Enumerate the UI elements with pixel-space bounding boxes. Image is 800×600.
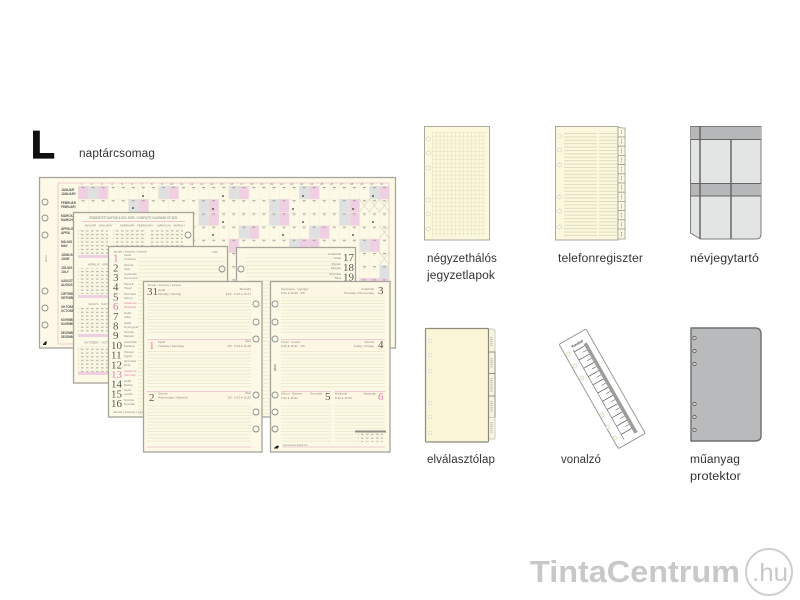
day numbers header: 22 bbox=[290, 182, 294, 186]
day numbers 17 to 19: Piroska bbox=[331, 266, 341, 270]
day block 4: Péntek bbox=[365, 340, 374, 344]
day list: 14 bbox=[111, 379, 122, 391]
day block 4: Titusz · Leona bbox=[281, 340, 300, 344]
day block 31: 31/5 · 6:32 ● 16:27 bbox=[226, 292, 251, 296]
day block 1: 1/5 · 6:32 ● 16:28 bbox=[227, 344, 251, 348]
day block 3: Genovéva · Gyöngyi bbox=[281, 287, 309, 291]
label: műanyag protektor: műanyag bbox=[690, 454, 740, 466]
day list: 13 bbox=[111, 369, 122, 381]
day numbers header: 25 bbox=[320, 182, 324, 186]
day block 31 bbox=[147, 286, 251, 335]
day block 1: Újév bbox=[245, 338, 251, 343]
mini calendar april bbox=[78, 262, 111, 298]
day list: 7 bbox=[113, 311, 119, 323]
mini month calendar bbox=[355, 430, 386, 442]
day list: Marcell bbox=[124, 334, 134, 338]
panel: business card holder bbox=[690, 126, 761, 239]
holes bbox=[253, 301, 259, 432]
day list: Ernő bbox=[124, 363, 131, 367]
side hole bbox=[185, 232, 191, 238]
day numbers 17 to 19: 19 bbox=[343, 272, 354, 284]
day numbers header: 17 bbox=[240, 182, 244, 186]
day list: 2 bbox=[113, 262, 118, 274]
middle band bbox=[691, 183, 761, 196]
day numbers header: 26 bbox=[330, 182, 334, 186]
day block 6: Boldizsár bbox=[335, 392, 347, 396]
day numbers header: 1 bbox=[81, 182, 83, 186]
mini calendar october bbox=[78, 340, 117, 375]
day numbers header: 15 bbox=[220, 182, 224, 186]
day numbers header: 10 bbox=[170, 182, 174, 186]
month labels: ÁPRILIS bbox=[61, 226, 74, 231]
day list: Fruzsina bbox=[124, 257, 136, 261]
side hole bbox=[238, 266, 244, 272]
holes bbox=[693, 336, 696, 432]
heading: size letter L: L bbox=[31, 124, 55, 167]
day block 2: 2/5 · 6:32 ● 16:29 bbox=[227, 396, 251, 400]
day list: Kedd bbox=[124, 321, 131, 325]
day list: Titusz bbox=[124, 286, 132, 290]
day list: Gyöngyvér bbox=[124, 325, 139, 329]
month labels: JÚLIUS bbox=[61, 265, 72, 270]
brand mark bbox=[43, 341, 47, 345]
day list: 11 bbox=[111, 350, 122, 362]
month labels: AUGUSZTUS bbox=[61, 279, 76, 283]
day numbers 17 to 19: 18 bbox=[343, 262, 354, 274]
weekend cells gray bbox=[88, 186, 390, 278]
day numbers header: 29 bbox=[360, 182, 364, 186]
day block 31: Hétfő bbox=[158, 288, 166, 292]
day numbers 17 to 19: Sára bbox=[335, 276, 341, 280]
day numbers header: 28 bbox=[350, 182, 354, 186]
day list: Vasárnap bbox=[124, 369, 137, 373]
day grid bbox=[78, 186, 389, 344]
month labels bbox=[61, 187, 77, 339]
day numbers header: 19 bbox=[260, 182, 264, 186]
footer line bbox=[147, 446, 251, 448]
day list: 9 bbox=[113, 330, 119, 342]
month footer: Január | January | Januar bbox=[113, 410, 147, 414]
holes bbox=[428, 339, 432, 435]
month labels: DECEMBER bbox=[61, 331, 77, 335]
panel: divider thumbnail bbox=[426, 328, 495, 442]
month labels: DECEMBER bbox=[61, 335, 77, 339]
panel: monthly sheet left bbox=[108, 246, 228, 417]
month labels: JANUÁR bbox=[61, 187, 75, 192]
day numbers header: 5 bbox=[121, 182, 123, 186]
day list: 1 bbox=[113, 253, 118, 265]
day list: Hétfő bbox=[124, 311, 132, 315]
day numbers header: 11 bbox=[180, 182, 183, 186]
day block 1: 1 bbox=[149, 340, 154, 352]
holes bbox=[558, 134, 562, 229]
day block 31: Monday | Montag bbox=[158, 292, 181, 296]
day list: Szerda bbox=[124, 263, 134, 267]
panel: ruler bbox=[559, 329, 645, 449]
label: négyzethálós jegyzetlapok: négyzethálós bbox=[427, 253, 497, 265]
day list: Simon bbox=[124, 296, 133, 300]
day block 1 bbox=[147, 338, 251, 389]
day numbers header: 8 bbox=[151, 182, 153, 186]
label: elválasztólap: elválasztólap bbox=[427, 454, 495, 466]
day block 3: 3 bbox=[378, 285, 384, 297]
day block 2: Wednesday | Mittwoch bbox=[158, 396, 188, 400]
holes bbox=[272, 301, 278, 432]
month labels: JÚNIUS bbox=[61, 252, 73, 257]
ruler title: Vonalzó bbox=[571, 339, 584, 349]
month header: Január | January | Januar bbox=[113, 250, 147, 254]
day numbers header: 30 bbox=[370, 182, 374, 186]
month labels: JUNE bbox=[61, 257, 70, 261]
day block 6: 6 bbox=[378, 391, 384, 403]
side hole bbox=[219, 266, 225, 272]
day list: Attila bbox=[124, 315, 131, 319]
day block 5 bbox=[281, 391, 331, 444]
day numbers header: 24 bbox=[310, 182, 314, 186]
day block 5: Simon · Edvárd bbox=[281, 392, 302, 396]
label: műanyag protektor: protektor bbox=[690, 471, 741, 483]
label: műanyag protektor bbox=[690, 454, 741, 483]
month labels: JULY bbox=[61, 270, 70, 274]
month labels: NOVEMBER bbox=[61, 322, 77, 326]
label: vonalzó: vonalzó bbox=[561, 454, 601, 466]
label: telefonregiszter: telefonregiszter bbox=[558, 253, 643, 265]
label: négyzethálós jegyzetlapok bbox=[426, 253, 497, 282]
day block 4: 6:32 ● 16:31 · 4/5 bbox=[281, 344, 305, 348]
day list: Ágota bbox=[124, 354, 132, 358]
calendar title: ÖSSZESÍTETT NAPTÁR A 2023. ÉVRE / COMPLETE CALENDAR OF 2023 bbox=[89, 215, 177, 220]
month labels: OCTOBER bbox=[61, 309, 77, 313]
index tabs bbox=[618, 127, 625, 239]
day numbers 17 to 19: Szombat bbox=[329, 272, 341, 276]
top band bbox=[690, 127, 761, 140]
day list: 3 bbox=[113, 272, 119, 284]
month labels: MARCH bbox=[61, 218, 74, 222]
day list: 15 bbox=[111, 388, 122, 400]
weekend cells pink bbox=[78, 186, 390, 291]
logo: TintaCentrum.hu: .hu bbox=[752, 559, 788, 587]
day list: Veronika bbox=[124, 373, 136, 377]
panel: weekly planner right page bbox=[270, 282, 390, 452]
day block 6: Vasárnap bbox=[363, 392, 376, 396]
side mark: 2023 bbox=[273, 364, 277, 371]
day list: Kedd bbox=[124, 253, 131, 257]
day numbers 17 to 19 bbox=[328, 252, 354, 284]
day block 4: 4 bbox=[378, 339, 384, 351]
day numbers header bbox=[81, 182, 384, 186]
scale band bbox=[584, 342, 638, 434]
day numbers header: 16 bbox=[230, 182, 234, 186]
scale ticks bbox=[574, 346, 632, 434]
day list: Boldizsár bbox=[124, 305, 136, 309]
day block 1: Tuesday | Dienstag bbox=[158, 344, 184, 348]
mini calendars first row bbox=[78, 224, 184, 258]
day list: Szerda bbox=[124, 398, 134, 402]
panel: monthly sheet right bbox=[236, 248, 356, 417]
day block 6 bbox=[335, 391, 385, 444]
day block 31: 31 bbox=[147, 286, 158, 298]
panel: complete calendar sheet bbox=[74, 212, 194, 383]
day block 1: Kedd bbox=[158, 340, 165, 344]
mini calendars first row: MÁRCIUS · MARCH bbox=[157, 224, 184, 228]
vertical straps bbox=[700, 126, 731, 239]
day numbers header: 23 bbox=[300, 182, 304, 186]
month labels: MÁRCIUS bbox=[61, 213, 76, 218]
day block 3: 6:32 ● 16:30 · 3/5 bbox=[281, 291, 305, 295]
day numbers 17 to 19: Péntek bbox=[332, 262, 341, 266]
day list bbox=[111, 253, 139, 410]
day numbers header: 9 bbox=[161, 182, 163, 186]
day list: Kedd bbox=[124, 388, 131, 392]
day numbers header: 4 bbox=[111, 182, 113, 186]
month labels: JANUARY bbox=[61, 192, 77, 196]
month labels: MAY bbox=[61, 244, 69, 248]
month labels: FEBRUARY bbox=[61, 205, 77, 209]
month labels: OKTÓBER bbox=[61, 304, 77, 309]
panel: weekly planner right page: www.tinta-papir.hu bbox=[283, 443, 308, 447]
day block 2: Szerda bbox=[158, 392, 168, 396]
day numbers header: 18 bbox=[250, 182, 254, 186]
day list: 4 bbox=[113, 282, 119, 294]
day list: Szombat bbox=[124, 359, 136, 363]
day numbers 17 to 19: 17 bbox=[343, 252, 354, 264]
day list: 8 bbox=[113, 320, 119, 332]
mini calendars first row: FEBRUÁR · FEBRUARY bbox=[120, 224, 153, 228]
panel: grid notes thumbnail bbox=[424, 126, 490, 240]
day block 3: Thursday | Donnerstag bbox=[344, 291, 374, 295]
holes bbox=[426, 137, 430, 231]
day block 2: 2 bbox=[149, 392, 154, 404]
day list: Melánia bbox=[124, 344, 135, 348]
day list: Genovéva bbox=[124, 276, 138, 280]
day list: Vasárnap bbox=[124, 301, 137, 305]
label: négyzethálós jegyzetlapok: jegyzetlapok bbox=[426, 270, 495, 282]
day numbers header: 20 bbox=[270, 182, 274, 186]
mini calendar july bbox=[78, 301, 108, 337]
panel: weekly planner left page bbox=[144, 282, 262, 452]
day numbers header: 13 bbox=[200, 182, 204, 186]
day block 4: Friday | Freitag bbox=[354, 344, 374, 348]
day numbers header: 14 bbox=[210, 182, 214, 186]
panel: monthly sheet left: 1/52 bbox=[212, 250, 218, 254]
day list: Szombat bbox=[124, 292, 136, 296]
day numbers header: 7 bbox=[141, 182, 143, 186]
day block 3 bbox=[281, 285, 385, 335]
day block 31: Marcella bbox=[240, 287, 251, 291]
day list: Hétfő bbox=[124, 379, 132, 383]
mini calendars first row: JANUÁR · JANUARY bbox=[84, 224, 113, 228]
day block 3: Csütörtök bbox=[361, 287, 374, 291]
day numbers header: 21 bbox=[280, 182, 284, 186]
day list: Ábel bbox=[124, 267, 130, 271]
day block 6: 6:32 ● 16:33 bbox=[335, 396, 352, 400]
day numbers header: 2 bbox=[91, 182, 93, 186]
tab captions bbox=[490, 337, 493, 433]
day block 2: Ábel bbox=[245, 391, 251, 395]
day block 4 bbox=[281, 339, 385, 389]
index tabs bbox=[488, 329, 495, 439]
month labels: NOVEMBER bbox=[61, 318, 77, 322]
sheet side mark: 2023 bbox=[44, 255, 48, 262]
day numbers 17 to 19: Antal bbox=[334, 256, 341, 260]
day numbers header: 12 bbox=[190, 182, 194, 186]
brand mark bbox=[274, 446, 279, 448]
panel: yearly planner sheet bbox=[40, 178, 396, 348]
day numbers header: 6 bbox=[131, 182, 133, 186]
mini calendar october: OKTÓBER · OCTOBER bbox=[84, 340, 117, 344]
month header: Január | January | Januar bbox=[147, 283, 181, 287]
day block 5: 6:32 ● 16:32 bbox=[281, 396, 298, 400]
crossed cells bbox=[359, 199, 389, 265]
panel: phone register thumbnail bbox=[556, 126, 625, 240]
logo: TintaCentrum.hu bbox=[530, 549, 792, 595]
logo: TintaCentrum.hu: TintaCentrum bbox=[530, 554, 740, 589]
day list: Szerda bbox=[124, 330, 134, 334]
label: névjegytartó: névjegytartó bbox=[690, 253, 759, 265]
month labels: SZEPTEMBER bbox=[61, 292, 76, 296]
month labels: AUGUST bbox=[61, 283, 75, 287]
day list: Csütörtök bbox=[124, 272, 137, 276]
day list: 16 bbox=[111, 398, 122, 410]
day block 5: Szombat bbox=[310, 392, 322, 396]
month labels: MÁJUS bbox=[61, 239, 72, 244]
day numbers header: 3 bbox=[101, 182, 103, 186]
heading: naptárcsomag: naptárcsomag bbox=[79, 148, 155, 160]
day list: Gusztáv bbox=[124, 402, 136, 406]
day list: 5 bbox=[113, 291, 119, 303]
day list: Lóránt bbox=[124, 392, 133, 396]
month labels: SEPTEMBER bbox=[61, 296, 77, 300]
month labels: FEBRUÁR bbox=[61, 200, 77, 205]
tab letters bbox=[620, 130, 622, 237]
day numbers header: 31 bbox=[380, 182, 384, 186]
event dots bbox=[132, 195, 374, 236]
holes of yearly sheet bbox=[42, 199, 48, 328]
mini calendar july: JÚLIUS · JULY bbox=[88, 301, 108, 306]
panel: plastic protector bbox=[691, 328, 761, 441]
day block 5: 5 bbox=[325, 391, 331, 403]
footer bbox=[282, 446, 385, 448]
day block 2 bbox=[147, 391, 251, 444]
day numbers 17 to 19: Csütörtök bbox=[328, 252, 341, 256]
day list: 6 bbox=[113, 301, 119, 313]
month labels: APRIL bbox=[61, 231, 71, 235]
day list: 10 bbox=[111, 340, 122, 352]
holes bbox=[566, 352, 617, 440]
day list: 12 bbox=[111, 359, 122, 371]
mini calendar april: ÁPRILIS · APRIL bbox=[88, 262, 111, 266]
day list: Péntek bbox=[124, 282, 134, 286]
day numbers header: 27 bbox=[340, 182, 344, 186]
day list: Csütörtök bbox=[124, 340, 137, 344]
day list: Bódog bbox=[124, 383, 133, 387]
day list: Péntek bbox=[124, 350, 134, 354]
